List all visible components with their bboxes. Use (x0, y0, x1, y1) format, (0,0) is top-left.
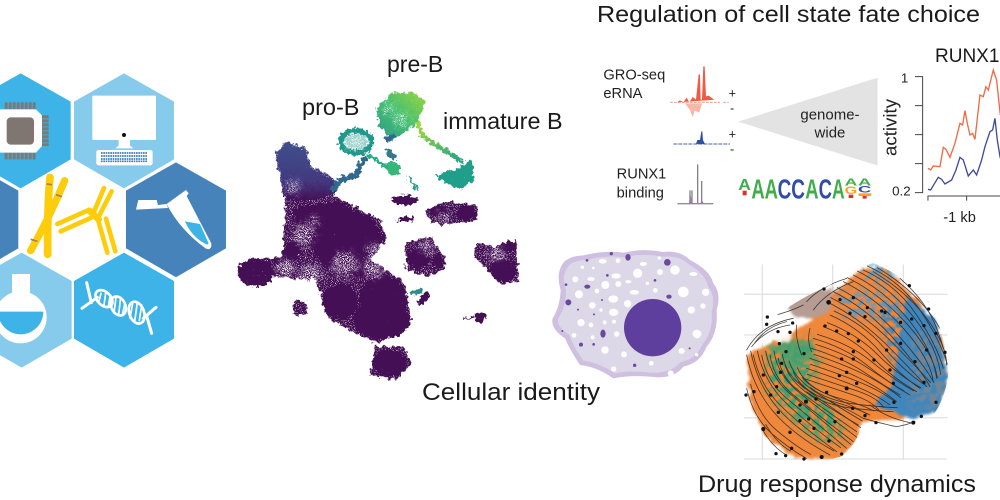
grid lines (744, 264, 947, 460)
motif logo: A (845, 177, 857, 188)
title: regulation of cell state fate choice: Regulation of cell state fate choice (597, 1, 980, 27)
chart: UMAP scatter of B cell development (238, 93, 518, 380)
heading: cellular identity: Cellular identity (422, 379, 600, 406)
solid green patch (780, 338, 815, 370)
motif logo: A (738, 177, 751, 194)
chart: red GRO-seq track (670, 66, 729, 117)
text: genome-wide: wide (814, 124, 845, 141)
label: plus minus red: + (729, 86, 736, 100)
icon: cell (552, 250, 719, 378)
cell clusters (747, 265, 948, 458)
cell nucleus (624, 299, 681, 356)
motif logo (738, 173, 872, 204)
chart: blue GRO-seq track (673, 131, 730, 144)
cell vesicles (572, 256, 709, 376)
icon: test tube hexagon (126, 162, 226, 277)
chart: RUNX1 activity line chart (880, 70, 1000, 226)
panel: hexagon icons (0, 73, 226, 368)
text: RUNX1 binding: binding (617, 185, 664, 201)
panel: genome-wide regulation (603, 66, 1000, 226)
axis label: 0.2: 0.2 (892, 183, 911, 198)
text: RUNX1 binding: RUNX1 (617, 167, 666, 183)
axis label: 1: 1 (901, 71, 908, 86)
motif logo: A (805, 173, 819, 204)
chart: RUNX1 binding track (677, 164, 713, 204)
motif logo: G (845, 185, 857, 197)
label: plus minus blue: + (729, 128, 736, 142)
mottled mixed populations (767, 265, 947, 442)
motif logo: AA (751, 173, 778, 204)
text: GRO-seq eRNA: GRO-seq (603, 67, 665, 83)
axis title: activity: activity (880, 98, 901, 156)
motif logo: C (819, 173, 832, 204)
label: plus minus blue: - (730, 142, 734, 156)
motif logo: A (832, 173, 845, 204)
cell granules (561, 252, 691, 367)
text: GRO-seq eRNA: eRNA (603, 86, 643, 102)
low density gaps (276, 103, 504, 285)
icon: computer hexagon (74, 73, 174, 188)
label: immature B: immature B (443, 108, 563, 134)
icon: left hexagon (0, 162, 18, 277)
streamline arrows (744, 284, 947, 461)
label: pro-B: pro-B (302, 94, 359, 120)
motif logo: C (858, 185, 872, 195)
connecting filaments (334, 123, 477, 319)
heading: RUNX1: RUNX1 (935, 46, 999, 67)
sparse clusters (250, 142, 518, 380)
motif logo: A (858, 177, 871, 188)
streamlines (747, 266, 951, 458)
motif logo: CC (778, 173, 805, 204)
shape: genome-wide wedge (738, 78, 878, 166)
axis label: -1 kb: -1 kb (943, 210, 976, 226)
dense clusters (238, 93, 517, 377)
icon: flask hexagon (0, 253, 72, 368)
icon: DNA hexagon (74, 253, 174, 368)
text: genome-wide: genome- (800, 106, 860, 123)
chart: drug response velocity streamplot (744, 264, 951, 461)
white gaps (752, 329, 796, 350)
heading: drug response dynamics: Drug response dynamics (698, 471, 976, 498)
label: plus minus red: - (730, 102, 734, 116)
label: pre-B: pre-B (387, 51, 443, 77)
green ring and blob (377, 93, 426, 140)
icon: microchip hexagon (0, 73, 71, 188)
icon: yellow chromosomes (31, 177, 115, 254)
